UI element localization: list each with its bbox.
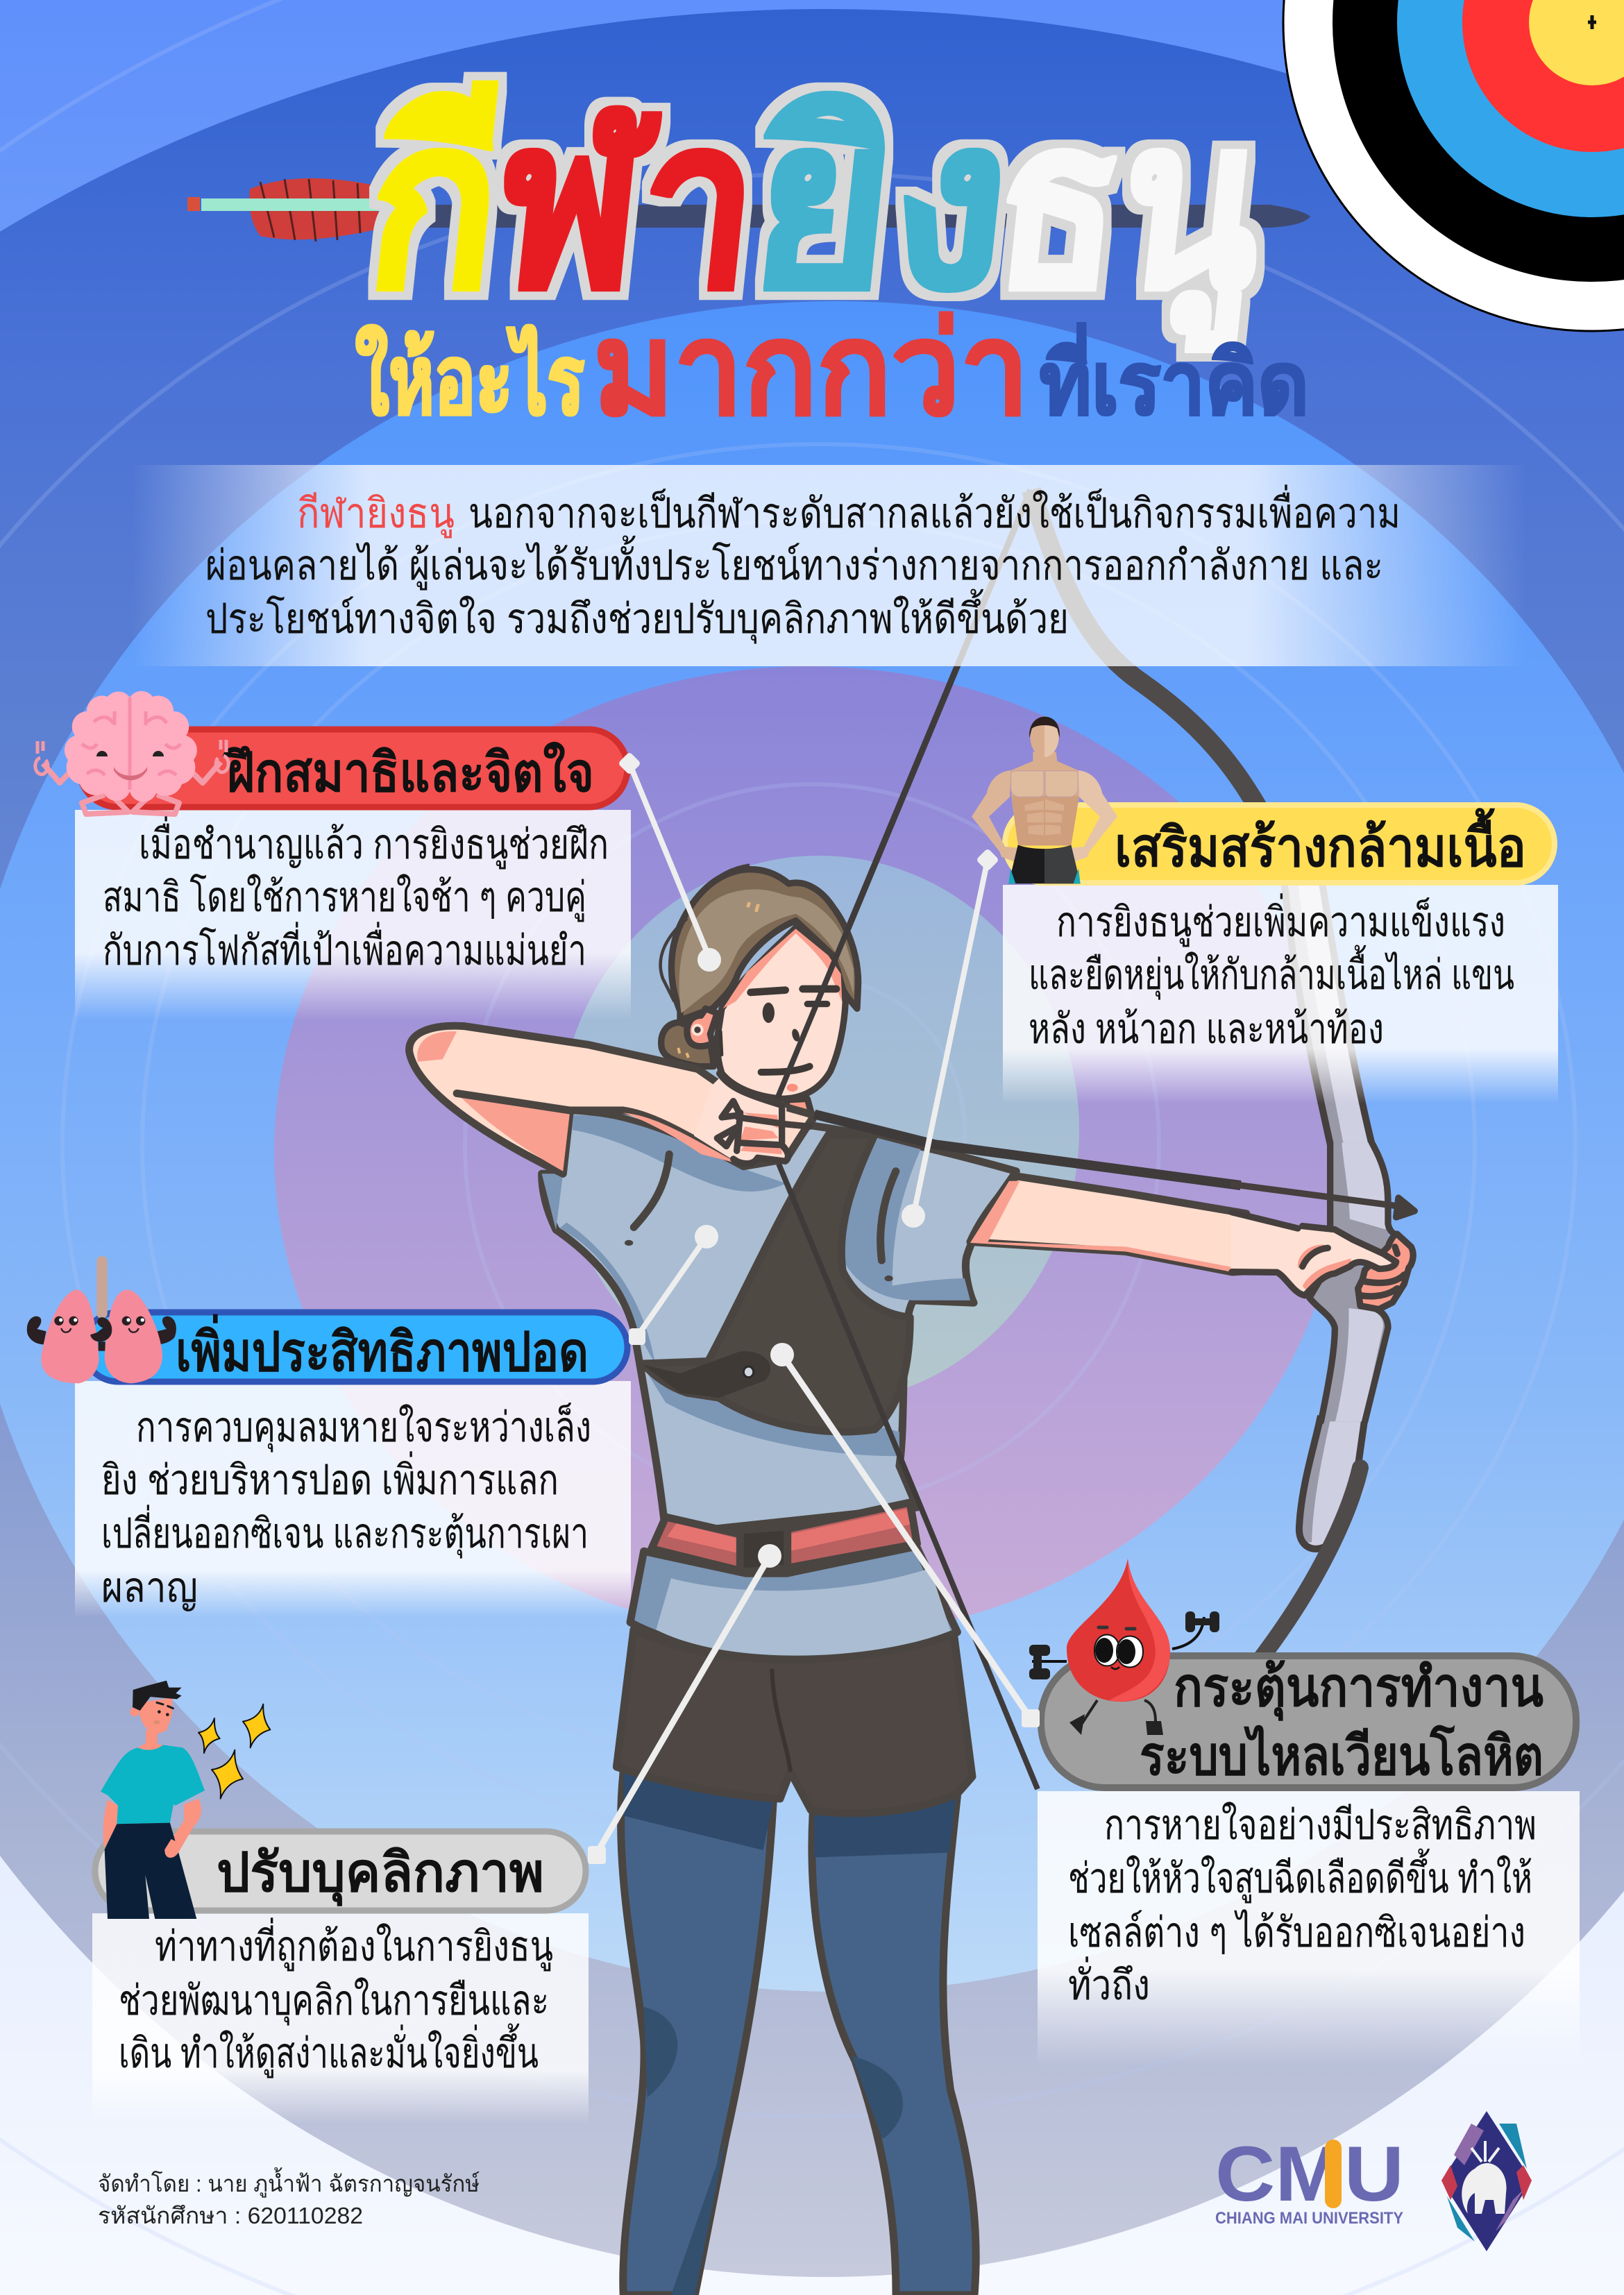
- icon: muscular man: [972, 716, 1117, 883]
- bowstring over body: [777, 823, 1038, 1789]
- panel: lungs: เพิ่มประสิทธิภาพปอด: [176, 1314, 589, 1382]
- title: กีฬายิงธนู: กี: [357, 73, 514, 337]
- belt: [652, 1502, 917, 1570]
- panel: muscles: หลัง หน้าอก และหน้าท้อง: [1029, 1006, 1384, 1052]
- panel: lungs: [75, 1312, 631, 1617]
- face: [717, 928, 845, 1099]
- footer credits: [98, 2167, 480, 2228]
- neck: [786, 1099, 813, 1140]
- panel: muscles: การยิงธนูช่วยเพิ่มความแข็งแรง: [1056, 893, 1505, 947]
- intro panel: ผ่อนคลายได้ ผู้เล่นจะได้รับทั้งประโยชน์ทางร่างกายจากการออกกำลังกาย และ: [205, 535, 1383, 591]
- hair bun: [661, 1022, 713, 1067]
- arrow shaft: [814, 1115, 1241, 1185]
- title: กีฬายิงธนู: ยิง: [741, 73, 1022, 337]
- connector: personality to waist: [588, 1544, 781, 1864]
- bow arm: [970, 1176, 1246, 1272]
- connector: muscle to shoulder: [902, 848, 999, 1228]
- bow upper limb and string behind panels: [777, 490, 1388, 1660]
- vest: [643, 1135, 910, 1432]
- subtitle: มากกว่า: [593, 298, 1029, 441]
- icon: confident man with sparkles: [101, 1681, 270, 1919]
- panel: focus and mind: เมื่อชำนาญแล้ว การยิงธนูช่วยฝึก: [139, 815, 609, 870]
- icon: blood drop with dumbbells: [1029, 1559, 1219, 1735]
- shirt: [542, 1110, 1016, 1534]
- vest strap: [643, 1351, 770, 1398]
- archer: legs, shorts and waist: [616, 1546, 976, 2295]
- panel: focus and mind: กับการโฟกัสที่เป้าเพื่อความแม่นยำ: [103, 922, 586, 974]
- panel: circulation: เซลล์ต่าง ๆ ได้รับออกซิเจนอย่าง: [1068, 1908, 1525, 1956]
- fingers: [1358, 1234, 1413, 1310]
- panel: personality: เดิน ทำให้ดูสง่าและมั่นใจยิ่งขึ้น: [119, 2023, 539, 2078]
- connector: mind to head: [618, 752, 721, 972]
- subtitle: [355, 298, 1309, 441]
- hair: [671, 870, 858, 1020]
- sparkles: [198, 1704, 270, 1799]
- panel: personality: ปรับบุคลิกภาพ: [217, 1842, 544, 1906]
- ear: [687, 1008, 717, 1047]
- panel: circulation: ทั่วถึง: [1068, 1956, 1150, 2008]
- intro panel: ประโยชน์ทางจิตใจ รวมถึงช่วยปรับบุคลิกภาพให้ดีขึ้นด้วย: [205, 588, 1069, 644]
- subtitle: ให้อะไร: [355, 324, 584, 434]
- facial features: [720, 989, 836, 1072]
- archery target top right: [1283, 0, 1624, 331]
- panel: circulation: กระตุ้นการทำงาน: [1174, 1657, 1543, 1721]
- panel: lungs: การควบคุมลมหายใจระหว่างเล็ง: [136, 1403, 591, 1453]
- archer: arms: [409, 1026, 1250, 1272]
- panel: circulation: [1038, 1656, 1580, 2066]
- title: กีฬายิงธนู: [357, 73, 1276, 353]
- connector: lungs to chest: [629, 1225, 718, 1345]
- intro panel: [132, 465, 1527, 666]
- title: กีฬายิงธนู: ฬา: [487, 73, 771, 337]
- intro panel: กีฬายิงธนู: [297, 490, 455, 539]
- archer: head: [661, 865, 858, 1140]
- arrow shaft and head: [1233, 1185, 1395, 1205]
- archer: drawing hand and finger tab: [694, 1074, 810, 1164]
- panel: focus and mind: [75, 729, 631, 1022]
- bow grip and lower limb: [1310, 1263, 1388, 1421]
- title: กีฬายิงธนู: ธนู: [983, 73, 1276, 353]
- icon: lungs with flexing arms: [27, 1256, 176, 1383]
- logo: CMU: CMU: [1215, 2131, 1404, 2217]
- panel: focus and mind: สมาธิ โดยใช้การหายใจช้า ๆ ควบคู่: [103, 873, 586, 922]
- icon: meditating brain: [35, 691, 228, 814]
- panel: circulation: ระบบไหลเวียนโลหิต: [1140, 1724, 1543, 1786]
- drawing arm: [409, 1026, 814, 1174]
- emblem: elephant crest: [1441, 2111, 1532, 2251]
- hand: [1230, 1211, 1395, 1296]
- panel: muscles: [1003, 805, 1558, 1103]
- footer credits: จัดทำโดย : นาย ภูน้ำฟ้า ฉัตรกาญจนรักษ์: [98, 2167, 480, 2198]
- panel: personality: ท่าทางที่ถูกต้องในการยิงธนู: [155, 1917, 553, 1972]
- logo: CMU: CHIANG MAI UNIVERSITY: [1215, 2209, 1403, 2228]
- panel: muscles: เสริมสร้างกล้ามเนื้อ: [1115, 808, 1526, 878]
- arrow behind title: [187, 178, 1310, 242]
- intro panel: นอกจากจะเป็นกีฬาระดับสากลแล้วยังใช้เป็นกิจกรรมเพื่อความ: [468, 484, 1401, 536]
- panel: lungs: ยิง ช่วยบริหารปอด เพิ่มการแลก: [101, 1451, 559, 1503]
- subtitle: ที่เราคิด: [1040, 323, 1309, 432]
- panel: personality: [92, 1831, 589, 2124]
- connector: circulation to heart: [770, 1343, 1040, 1727]
- bow riser: [1330, 1143, 1389, 1251]
- panel: lungs: เปลี่ยนออกซิเจน และกระตุ้นการเผา: [101, 1505, 589, 1559]
- archer: bow hand, grip and arrowhead: [1230, 1143, 1414, 1421]
- panel: lungs: ผลาญ: [101, 1564, 198, 1611]
- panel: personality: ช่วยพัฒนาบุคลิกในการยืนและ: [119, 1977, 549, 2026]
- footer credits: รหัสนักศึกษา : 620110282: [98, 2203, 363, 2228]
- shirt shading: [572, 1115, 786, 1192]
- archer: torso: [542, 1110, 1016, 1572]
- panel: focus and mind: ฝึกสมาธิและจิตใจ: [222, 741, 594, 803]
